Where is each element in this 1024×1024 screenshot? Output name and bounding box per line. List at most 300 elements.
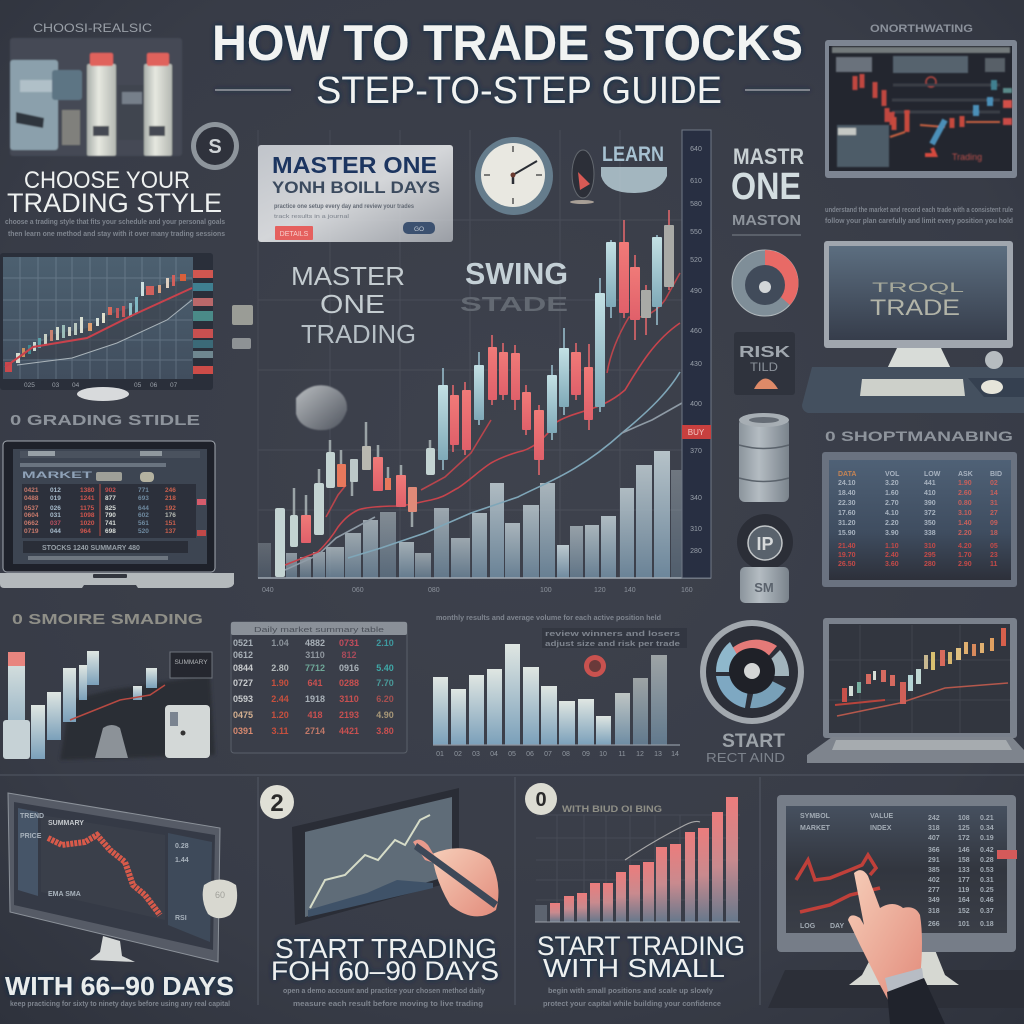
price scale strip: 400 <box>690 401 702 408</box>
panel: laptop table: 1020 <box>80 520 95 527</box>
axis labels: 07 <box>544 751 552 758</box>
dark area line <box>308 880 433 917</box>
panel: table monitor: 2.20 <box>885 520 899 527</box>
panel: table monitor: 1.90 <box>958 480 972 487</box>
price scale strip: 430 <box>690 361 702 368</box>
panel: lower table: 3110 <box>339 694 359 704</box>
panel: monitor with pointing hand <box>768 795 1024 1024</box>
panel: table monitor: 3.60 <box>885 561 899 568</box>
screen table: 0.18 <box>980 921 994 928</box>
icon: coin: S <box>208 136 222 158</box>
label: swing trade: STADE <box>460 294 568 316</box>
axis labels: 10 <box>599 751 607 758</box>
panel: lower table: 0727 <box>233 678 253 688</box>
keyboard <box>860 379 965 396</box>
panel: laptop table: 031 <box>50 512 61 519</box>
axis labels: 08 <box>562 751 570 758</box>
icon: risk box: TILD <box>750 360 778 374</box>
panel: laptop table: 1098 <box>80 512 95 519</box>
panel: lower table: 3.80 <box>376 726 394 736</box>
monitor stand <box>849 950 959 985</box>
monitor chart <box>832 47 1012 167</box>
caption: keep practicing for sixty to ninety days before using any real capital <box>10 1001 230 1008</box>
panel: table monitor: 19.70 <box>838 552 856 559</box>
screen table: VALUE <box>870 813 894 820</box>
panel: table monitor: 390 <box>924 500 936 507</box>
panel: table monitor: 24.10 <box>838 480 856 487</box>
panel: table monitor: 26.50 <box>838 561 856 568</box>
panel: table monitor: 1.40 <box>958 520 972 527</box>
x axis labels: 120 <box>594 587 606 594</box>
label: master one trading: TRADING <box>301 319 416 349</box>
panel: lower table: 812 <box>341 650 357 660</box>
screen table: 101 <box>958 921 970 928</box>
desk <box>802 367 1024 413</box>
panel: table monitor: 17.60 <box>838 510 856 517</box>
panel: table monitor: 3.20 <box>885 480 899 487</box>
chart header text: monthly results and average volume for each active position held <box>436 615 661 622</box>
laptop chart <box>807 625 1024 763</box>
screen table: 349 <box>928 897 940 904</box>
panel: laptop table: 520 <box>138 528 149 535</box>
icon: start dial <box>700 620 804 724</box>
panel: lower table: 1.04 <box>271 638 289 648</box>
small round icon <box>985 351 1003 369</box>
panel: lower table: Daily market summary table <box>254 627 384 634</box>
description text <box>5 219 225 238</box>
heading <box>271 933 499 986</box>
axis labels: 14 <box>671 751 679 758</box>
panel: laptop table: 019 <box>50 495 61 502</box>
price scale strip: 460 <box>690 328 702 335</box>
panel: master one card <box>258 145 453 242</box>
icon: round device: 60 <box>215 890 225 900</box>
laptop base <box>807 737 1024 763</box>
monitor caption: follow your plan carefully and limit every position you hold <box>825 218 1013 225</box>
screen table: 158 <box>958 857 970 864</box>
panel: lower table: 1.90 <box>271 678 289 688</box>
screen labels: 0.28 <box>175 843 189 850</box>
price scale strip: 610 <box>690 178 702 185</box>
bottom panel dividers <box>0 775 1024 1005</box>
screen table: 0.28 <box>980 857 994 864</box>
axis labels: 03 <box>52 382 60 389</box>
axis labels: 01 <box>436 751 444 758</box>
panel: table monitor: 15.90 <box>838 530 856 537</box>
screen table: 119 <box>958 887 969 894</box>
panel: lower table <box>231 622 407 753</box>
screen table: LOG <box>800 923 816 930</box>
panel: table monitor: 18.40 <box>838 490 856 497</box>
caption <box>543 988 721 1008</box>
bars <box>433 644 667 745</box>
monitor chart: Trading <box>952 152 982 162</box>
baseline <box>433 744 680 746</box>
panel: table monitor: 338 <box>924 530 936 537</box>
x axis labels: 060 <box>352 587 364 594</box>
axis labels <box>24 382 178 389</box>
panel: laptop table: 902 <box>105 487 116 494</box>
monitor <box>777 795 1016 952</box>
label: swing: SWING <box>465 256 568 291</box>
small heading: choose realistic: CHOOSI-REALSIC <box>33 21 152 35</box>
volume bars <box>258 451 682 578</box>
monitor caption <box>825 207 1013 225</box>
panel: lower table: 7712 <box>305 663 325 673</box>
red trend line <box>70 685 165 720</box>
panel: laptop table: 0421 <box>24 487 39 494</box>
panel: table monitor: ASK <box>958 471 973 478</box>
dark backdrop <box>60 675 215 760</box>
price scale strip: 640 <box>690 146 702 153</box>
panel: lower table: 4882 <box>305 638 325 648</box>
screen labels: 1.44 <box>175 857 189 864</box>
icon: risk box <box>734 332 795 395</box>
monitor heading: ONORTHWATING <box>870 23 973 35</box>
screen table: 152 <box>958 908 970 915</box>
panel: start trading with small <box>525 783 745 1008</box>
hand holding pen <box>413 840 498 916</box>
panel: lower table: 0288 <box>339 678 359 688</box>
price scale strip <box>682 130 711 578</box>
heading: smoke smashing: 0 SMOIRE SMADING <box>12 611 203 628</box>
card subheading: YONH BOILL DAYS <box>272 178 440 197</box>
screen table: SYMBOL <box>800 813 831 820</box>
step badge <box>525 783 557 815</box>
heading: WITH SMALL <box>543 953 725 983</box>
heading: START TRADING <box>275 933 497 964</box>
panel: laptop table: MARKET <box>22 470 93 480</box>
panel: lower table: 0391 <box>233 726 253 736</box>
panel: lower left bars <box>3 651 215 760</box>
red button <box>275 226 313 240</box>
screen table: 242 <box>928 815 940 822</box>
axis labels: 06 <box>150 382 158 389</box>
price scale strip: 340 <box>690 495 702 502</box>
screen labels: SUMMARY <box>48 820 84 827</box>
icon: clock <box>475 137 553 215</box>
icon: round device <box>203 880 237 918</box>
panel: laptop table: 790 <box>105 512 116 519</box>
screen labels: TREND <box>20 813 44 820</box>
panel: laptop table: 044 <box>50 528 61 535</box>
panel: lower table: 6.20 <box>376 694 394 704</box>
laptop base <box>0 573 234 588</box>
monitor <box>8 793 220 962</box>
panel: laptop table: 693 <box>138 495 149 502</box>
screen table: 164 <box>958 897 970 904</box>
card body text: track results in a journal <box>274 214 349 220</box>
mouse pad <box>968 378 1024 397</box>
x axis labels: 160 <box>681 587 693 594</box>
panel: table monitor: 441 <box>924 480 936 487</box>
price scale strip: 490 <box>690 288 702 295</box>
panel: table monitor: 4.20 <box>958 543 972 550</box>
panel: table monitor: 2.20 <box>958 530 972 537</box>
red chart line <box>48 835 160 915</box>
panel: top right monitor <box>825 23 1017 225</box>
side tags <box>193 270 213 374</box>
icon: metal object <box>296 385 347 430</box>
shaded area under candles <box>17 280 192 360</box>
chart caption: WITH BIUD OI BING <box>562 804 662 814</box>
red tag <box>997 850 1017 859</box>
panel: table monitor: 4.10 <box>885 510 899 517</box>
icon: red badge <box>584 655 606 677</box>
screen labels <box>20 813 189 922</box>
panel: table monitor: 1.70 <box>958 552 972 559</box>
screen table: 133 <box>958 867 970 874</box>
panel: laptop table: 037 <box>50 520 61 527</box>
panel: lower table: 2714 <box>305 726 325 736</box>
panel: lower table: 641 <box>307 678 323 688</box>
x axis labels <box>262 587 693 594</box>
screen table: 108 <box>958 815 970 822</box>
screen table: 0.37 <box>980 908 994 915</box>
panel: lower table: 2.10 <box>376 638 394 648</box>
axis labels: 025 <box>24 382 35 389</box>
monitor stand base <box>77 387 129 401</box>
axis labels: 13 <box>654 751 662 758</box>
axis labels: 11 <box>618 751 626 758</box>
panel: choose your trading style <box>5 21 239 238</box>
panel: table monitor: 23 <box>990 552 998 559</box>
screen labels: RSI <box>175 915 187 922</box>
panel: lower table: 0844 <box>233 663 253 673</box>
panel: laptop table: 741 <box>105 520 116 527</box>
screen table: 277 <box>928 887 940 894</box>
axis labels: 12 <box>636 751 644 758</box>
axis labels: 07 <box>170 382 178 389</box>
panel: table monitor: 2.70 <box>885 500 899 507</box>
chart header text: review winners and losers <box>545 631 680 638</box>
pointing hand <box>848 870 945 1024</box>
panel: laptop table: 0537 <box>24 505 39 512</box>
heading: FOH 60–90 DAYS <box>271 956 499 986</box>
panel: lower table: 1.20 <box>271 710 289 720</box>
panel: lower table: 2193 <box>339 710 359 720</box>
screen table: 172 <box>958 835 970 842</box>
panel: lower table: 3.11 <box>271 726 289 736</box>
screen labels: EMA SMA <box>48 891 81 898</box>
chart header text: adjust size and risk per trade <box>545 641 680 648</box>
screen table: 125 <box>958 825 970 832</box>
screen table: 407 <box>928 835 940 842</box>
description text: then learn one method and stay with it over many trading sessions <box>8 231 225 238</box>
x axis labels: 040 <box>262 587 274 594</box>
panel: laptop table: 0604 <box>24 512 39 519</box>
panel: lower table: 0612 <box>233 650 253 660</box>
panel: lower table: 1918 <box>305 694 325 704</box>
panel: laptop table: 012 <box>50 487 61 494</box>
panel: table monitor: 14 <box>990 490 998 497</box>
blue pill <box>403 222 435 234</box>
panel: table monitor: 11 <box>990 561 998 568</box>
caption: protect your capital while building your confidence <box>543 1001 721 1008</box>
price scale strip: 370 <box>690 448 702 455</box>
trend line <box>625 821 700 860</box>
heading: choose your trading style: CHOOSE YOUR <box>24 167 190 194</box>
panel: lower right laptop <box>0 618 1024 1024</box>
panel: lower table: 2.44 <box>271 694 289 704</box>
x axis labels: 140 <box>624 587 636 594</box>
icon: round stamp: IP <box>756 534 774 554</box>
monitor stand <box>90 936 135 962</box>
panel: table monitor: 3.90 <box>885 530 899 537</box>
axis line <box>258 577 711 579</box>
panel: table monitor: BID <box>990 471 1002 478</box>
subtitle: STEP-TO-STEP GUIDE <box>316 70 722 112</box>
right device <box>165 705 210 758</box>
screen table: 0.31 <box>980 877 994 884</box>
panel: table monitor: 372 <box>924 510 936 517</box>
red chart <box>796 855 880 912</box>
panel: laptop table: 026 <box>50 505 61 512</box>
panel: middle bar chart <box>433 615 687 758</box>
chart grid <box>536 815 740 922</box>
panel: lower table: 0475 <box>233 710 253 720</box>
heading: START TRADING <box>537 931 745 961</box>
panel: laptop table: 137 <box>165 528 176 535</box>
panel: table monitor: 18 <box>990 530 998 537</box>
price scale strip: BUY <box>688 428 705 437</box>
x axis labels: 100 <box>540 587 552 594</box>
panel: table monitor: 2.60 <box>958 490 972 497</box>
screen table: MARKET <box>800 825 831 832</box>
panel: table monitor: 280 <box>924 561 936 568</box>
growth bars <box>535 797 738 922</box>
screen table: 266 <box>928 921 940 928</box>
trend lines <box>285 273 682 570</box>
price scale strip: 280 <box>690 548 702 555</box>
title: HOW TO TRADE STOCKS <box>212 15 803 71</box>
panel: lower table: 0731 <box>339 638 359 648</box>
screen table: 146 <box>958 847 970 854</box>
candlesticks <box>275 210 674 577</box>
panel: table monitor: 05 <box>990 543 998 550</box>
icon: risk box: RISK <box>739 344 791 361</box>
icon: learn badge <box>570 143 667 204</box>
screen table: 177 <box>958 877 970 884</box>
panel: with 60-90 days <box>5 793 237 1008</box>
icon: round stamp <box>737 514 793 570</box>
axis labels <box>436 751 679 758</box>
panel: laptop table: 561 <box>138 520 149 527</box>
panel: laptop table: 246 <box>165 487 176 494</box>
heading: choose your trading style: TRADING STYLE <box>7 188 222 218</box>
chart grid <box>258 130 682 578</box>
mouse <box>981 380 1003 394</box>
panel: table monitor: 410 <box>924 490 936 497</box>
desk <box>768 970 1024 1008</box>
label: start: START <box>722 731 785 752</box>
panel: table monitor: VOL <box>885 471 900 478</box>
axis labels: 05 <box>134 382 142 389</box>
label: master one column: MASTON <box>732 212 801 229</box>
screen table: 402 <box>928 877 940 884</box>
icon: short cylinder <box>740 567 789 603</box>
screen table: 0.21 <box>980 815 994 822</box>
screen table: 318 <box>928 908 940 915</box>
screen table: 0.25 <box>980 887 994 894</box>
icon: short cylinder: SM <box>754 580 774 595</box>
heading: grading style: 0 GRADING STIDLE <box>10 412 200 429</box>
panel: table monitor: 295 <box>924 552 936 559</box>
red bar top <box>8 652 25 666</box>
panel: table monitor: 09 <box>990 520 998 527</box>
monitor stand <box>885 348 953 373</box>
price scale strip: 580 <box>690 201 702 208</box>
axis labels: 03 <box>472 751 480 758</box>
panel: laptop table: 1175 <box>80 505 94 512</box>
panel: left chart monitor <box>0 253 213 401</box>
panel: laptop table: 602 <box>138 512 149 519</box>
panel: lower table: 0521 <box>233 638 253 648</box>
label: master one trading: ONE <box>320 289 385 319</box>
label: master one column: MASTR <box>733 144 804 169</box>
step badge: 2 <box>270 790 284 817</box>
chart header text <box>436 615 687 648</box>
panel: laptop table: 176 <box>165 512 176 519</box>
metal cup <box>95 725 128 758</box>
red button: DETAILS <box>280 231 309 238</box>
small icons: left of chart <box>232 305 253 349</box>
panel: laptop table: 0662 <box>24 520 39 527</box>
panel: lower table: 0593 <box>233 694 253 704</box>
panel: table monitor: 2.90 <box>958 561 972 568</box>
screen table: 366 <box>928 847 940 854</box>
card heading: MASTER ONE <box>272 152 437 178</box>
axis labels: 04 <box>490 751 498 758</box>
heading <box>537 931 745 983</box>
panel: table monitor: LOW <box>924 471 941 478</box>
price scale strip: 520 <box>690 257 702 264</box>
panel: laptop table: 0488 <box>24 495 39 502</box>
axis labels: 06 <box>526 751 534 758</box>
panel: start trading for 60-90 days <box>260 785 499 1008</box>
bars <box>8 651 157 759</box>
axis labels: 04 <box>72 382 80 389</box>
panel: table monitor: 1.60 <box>885 490 899 497</box>
label: start <box>706 731 785 765</box>
caption: begin with small positions and scale up slowly <box>548 988 713 995</box>
price scale strip: 550 <box>690 229 702 236</box>
panel: laptop table: 218 <box>165 495 176 502</box>
panel: central candlestick chart <box>258 130 711 594</box>
panel: table monitor <box>822 452 1017 587</box>
screen table: 0.34 <box>980 825 994 832</box>
label: start: RECT AIND <box>706 750 785 765</box>
panel: laptop table: 1241 <box>80 495 95 502</box>
screen labels: PRICE <box>20 833 42 840</box>
panel: lower table: 7.70 <box>376 678 394 688</box>
panel: laptop table <box>0 441 234 588</box>
panel: laptop table: 1380 <box>80 487 95 494</box>
axis labels: 05 <box>508 751 516 758</box>
panel: laptop table: 644 <box>138 505 149 512</box>
panel: table monitor: 0.80 <box>958 500 972 507</box>
heading: choose your trading style <box>7 167 222 218</box>
mini candles <box>5 274 186 372</box>
panel: table monitor: 350 <box>924 520 936 527</box>
screen table: 385 <box>928 867 940 874</box>
dark label box <box>170 652 212 678</box>
panel: table monitor: 310 <box>924 543 936 550</box>
label: master one column <box>731 144 804 235</box>
panel: laptop table: 964 <box>80 528 91 535</box>
screen table: 0.46 <box>980 897 994 904</box>
panel: table monitor: 21.40 <box>838 543 856 550</box>
